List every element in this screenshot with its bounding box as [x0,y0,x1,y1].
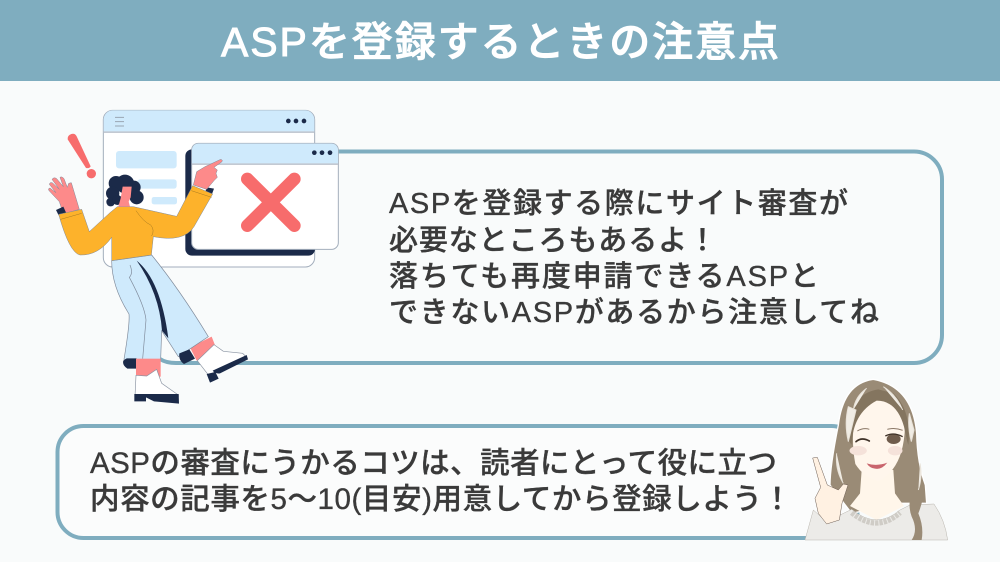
trousers [112,255,208,369]
hair shine [836,387,921,490]
text block: review warning: 落ちても再度申請できるASPと [389,260,819,293]
cheek blush [849,446,902,455]
text block: review warning [389,187,879,329]
winking eye [856,439,869,442]
left cuff [56,207,67,215]
icon: back browser window [103,110,315,267]
back hair [830,379,927,513]
face [853,400,905,481]
sweater collar [852,513,900,523]
pointing hand [193,159,222,189]
front leg shoe [134,359,179,404]
front hair [847,389,909,445]
sweater [805,504,948,540]
icon: error window with red X [185,143,338,256]
right cuff [205,187,214,194]
title: ASPを登録するときの注意点 [221,19,779,65]
icon: exclamation mark [68,134,96,178]
title banner [0,0,1000,81]
text block: review warning: ASPを登録する際にサイト審査が [389,187,848,220]
text block: review warning: できないASPがあるから注意してね [389,296,879,329]
open eye [885,434,903,444]
panel: review warning speech box [160,152,942,363]
raised left hand [48,177,79,214]
panel: tip speech box [58,426,858,538]
hair strands over sweater [910,483,924,540]
hair and face [106,175,144,207]
eyebrows [857,429,903,431]
illustration: winking woman pointing up [805,379,948,540]
yellow sweater [59,186,213,261]
text block: review tip [90,447,792,516]
raised hand [813,457,848,524]
rear leg shoe [190,337,248,383]
neck [850,470,904,520]
text block: review warning: 必要なところもあるよ！ [389,224,717,257]
text block: review tip: ASPの審査にうかるコツは、読者にとって役に立つ [90,447,777,480]
illustration: woman pointing at rejected web page [48,110,338,404]
text block: review tip: 内容の記事を5〜10(目安)用意してから登録しよう！ [90,483,792,516]
figure: woman [48,159,248,404]
mouth [867,463,887,469]
